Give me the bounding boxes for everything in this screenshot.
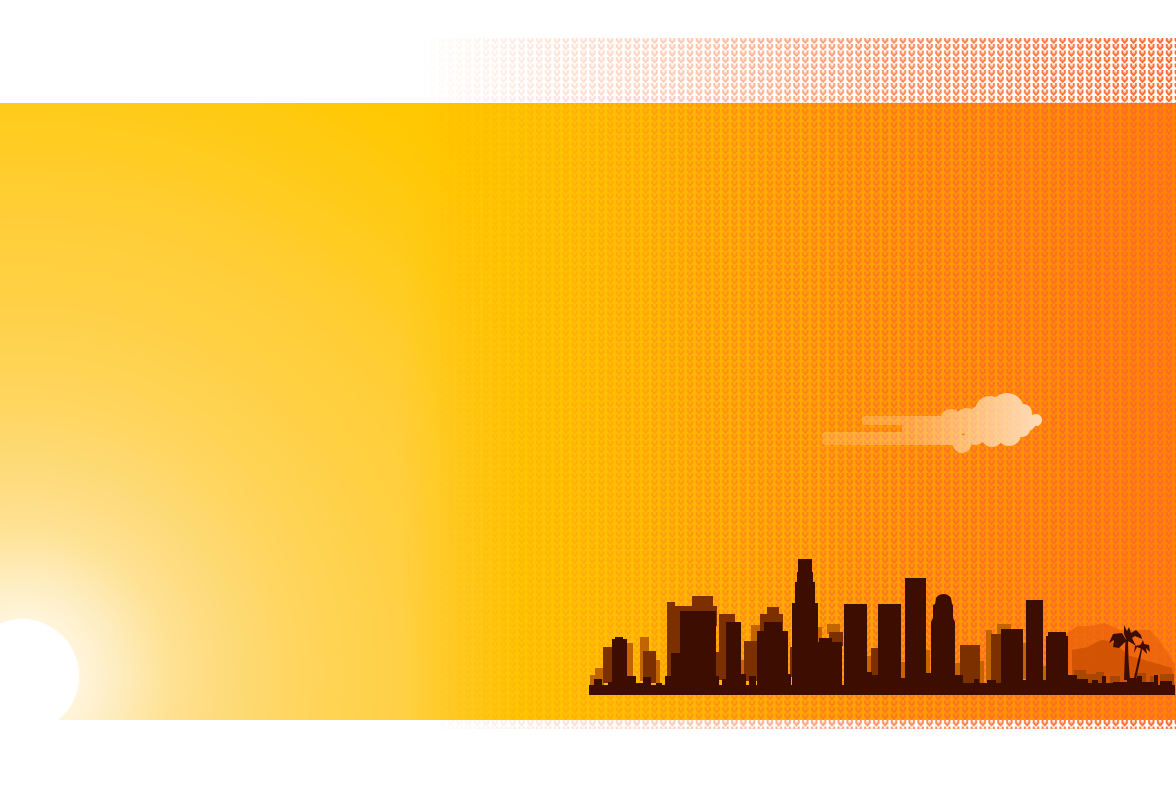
icon: cloud with speed lines (822, 393, 1042, 453)
icon: sun (0, 619, 79, 720)
darker back buildings (603, 596, 1001, 685)
lighter back buildings (590, 624, 1046, 687)
foreground buildings (589, 559, 1175, 695)
knit pattern strip: top (420, 38, 1176, 103)
knit pattern strip: bottom (440, 720, 1176, 729)
icon: small palm tree (1134, 640, 1150, 679)
sky panel with sun glow (0, 103, 1176, 720)
low distant blocks near hills (1074, 670, 1174, 686)
skyline city silhouette (589, 559, 1175, 695)
mountains (1066, 623, 1175, 690)
icon: large palm tree (1109, 625, 1142, 680)
